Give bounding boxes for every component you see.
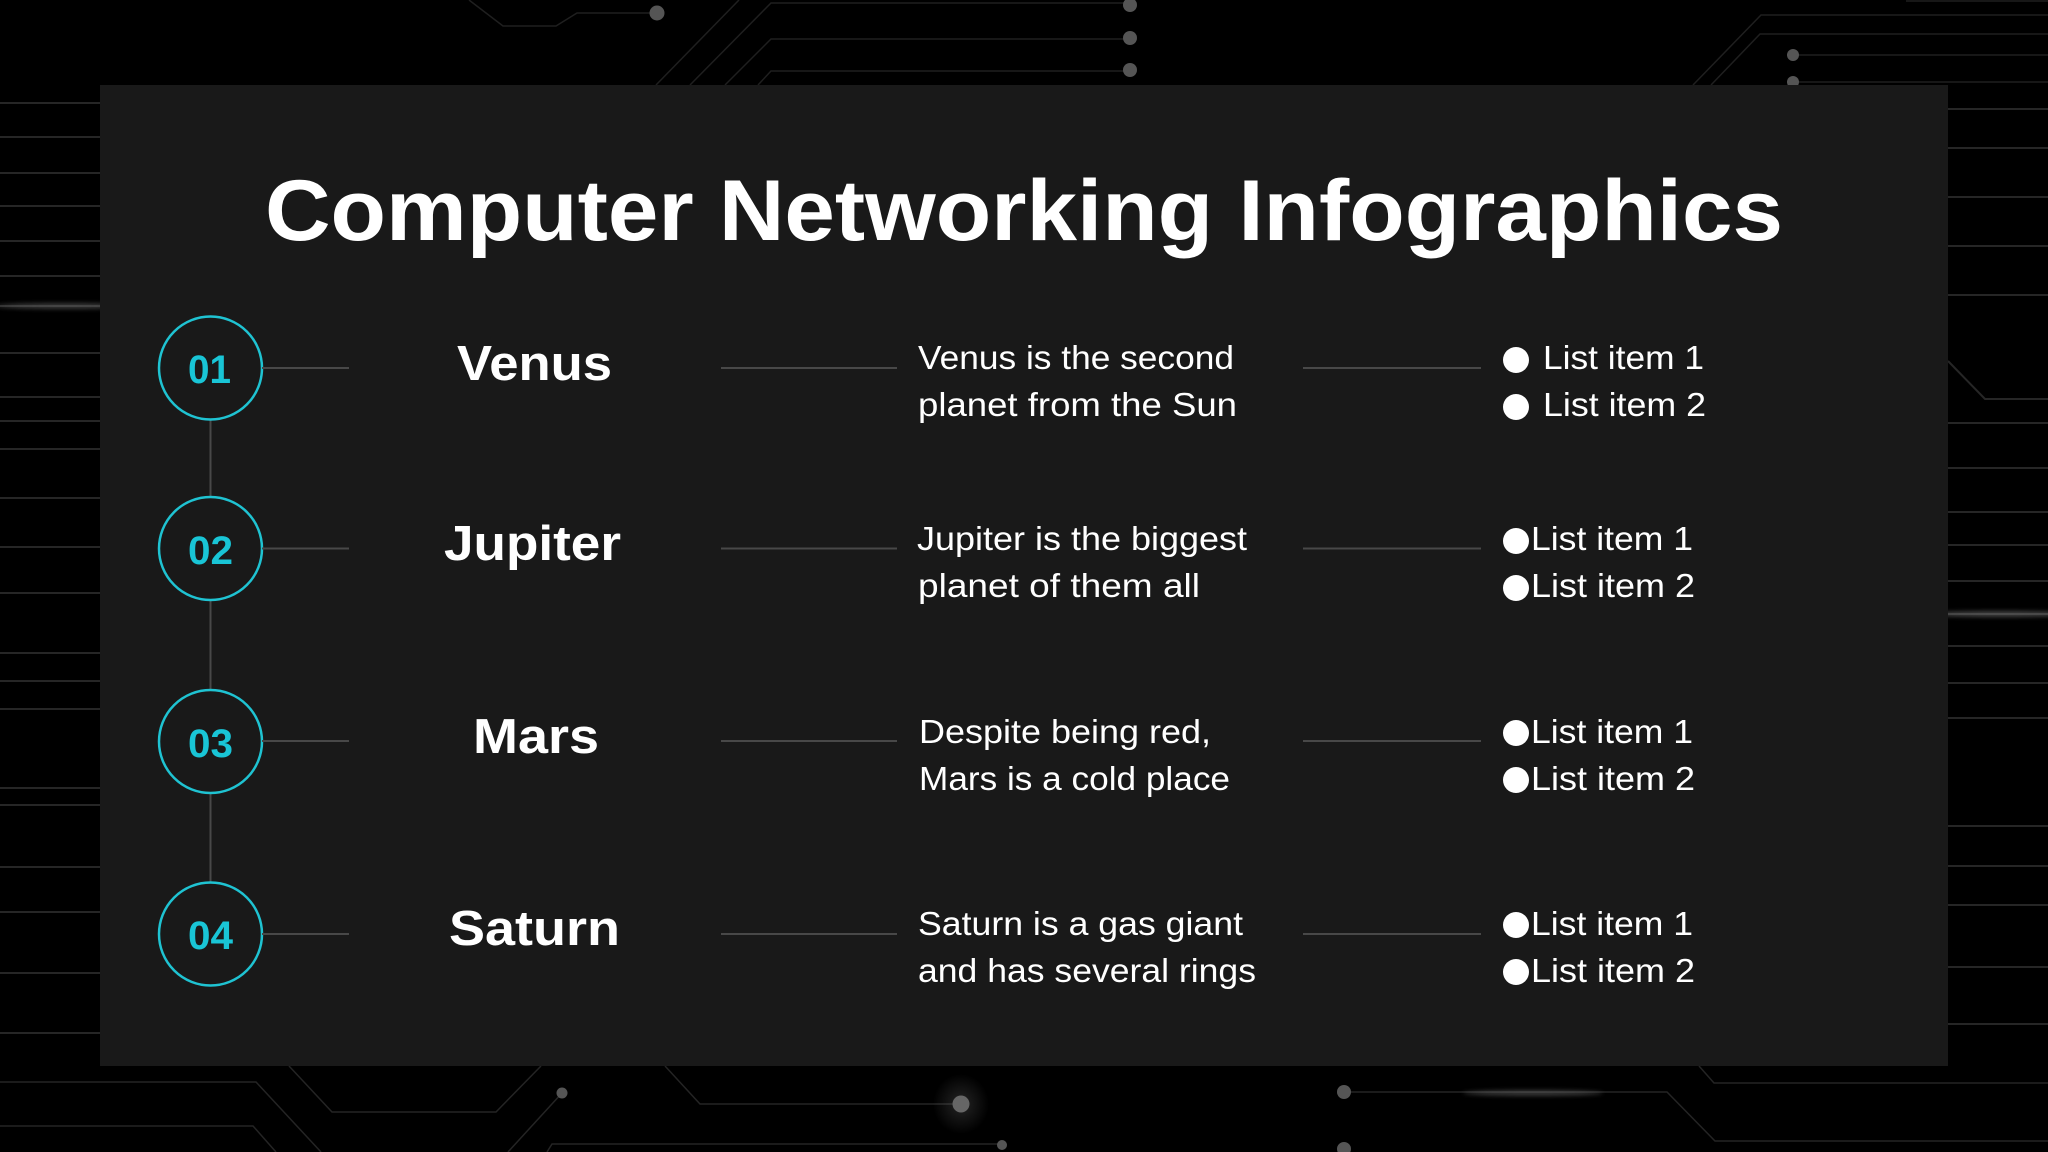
connector: vertical timeline — [210, 419, 212, 882]
number badge 03 — [159, 690, 262, 793]
list Jupiter: List item 2 — [1531, 568, 1695, 605]
list Jupiter: List item 1 — [1531, 521, 1693, 558]
description Mars: Despite being red, — [919, 714, 1211, 751]
number badge 04 — [159, 882, 262, 986]
description Mars: Mars is a cold place — [919, 761, 1230, 798]
description Jupiter: Jupiter is the biggest — [917, 521, 1248, 558]
row 1: Venus — [159, 316, 1706, 424]
list Venus: List item 1 — [1543, 340, 1704, 377]
list Saturn — [1503, 906, 1695, 990]
list Venus — [1503, 340, 1706, 424]
panel: main dark card — [100, 85, 1948, 1066]
planet name Saturn: Saturn — [449, 902, 620, 956]
number badge 03: 03 — [188, 722, 233, 766]
planet name Mars: Mars — [473, 710, 599, 764]
planet name Venus: Venus — [457, 337, 612, 391]
list Mars: List item 1 — [1531, 714, 1693, 751]
planet name Jupiter: Jupiter — [444, 517, 621, 571]
connector lines row 1 — [262, 367, 1481, 369]
description Jupiter: planet of them all — [918, 568, 1200, 605]
list Mars: List item 2 — [1531, 761, 1695, 798]
title: Computer Networking Infographics — [265, 163, 1783, 259]
list Mars — [1503, 714, 1695, 798]
number badge 02: 02 — [188, 529, 233, 573]
connector lines row 3 — [262, 740, 1481, 742]
connector lines row 4 — [262, 933, 1481, 935]
row 2: Jupiter — [159, 497, 1695, 605]
list Venus: List item 2 — [1543, 387, 1706, 424]
list Saturn: List item 2 — [1531, 953, 1695, 990]
description Venus: planet from the Sun — [918, 387, 1237, 424]
description Saturn: Saturn is a gas giant — [918, 906, 1244, 943]
list Jupiter — [1503, 521, 1695, 605]
description Venus: Venus is the second — [918, 340, 1234, 377]
number badge 04: 04 — [188, 914, 234, 958]
row 4: Saturn — [159, 882, 1695, 990]
description Saturn: and has several rings — [918, 953, 1256, 990]
number badge 02 — [159, 497, 262, 600]
number badge 01: 01 — [188, 348, 231, 392]
list Saturn: List item 1 — [1531, 906, 1693, 943]
row 3: Mars — [159, 690, 1695, 798]
number badge 01 — [159, 316, 262, 420]
connector lines row 2 — [262, 548, 1481, 550]
